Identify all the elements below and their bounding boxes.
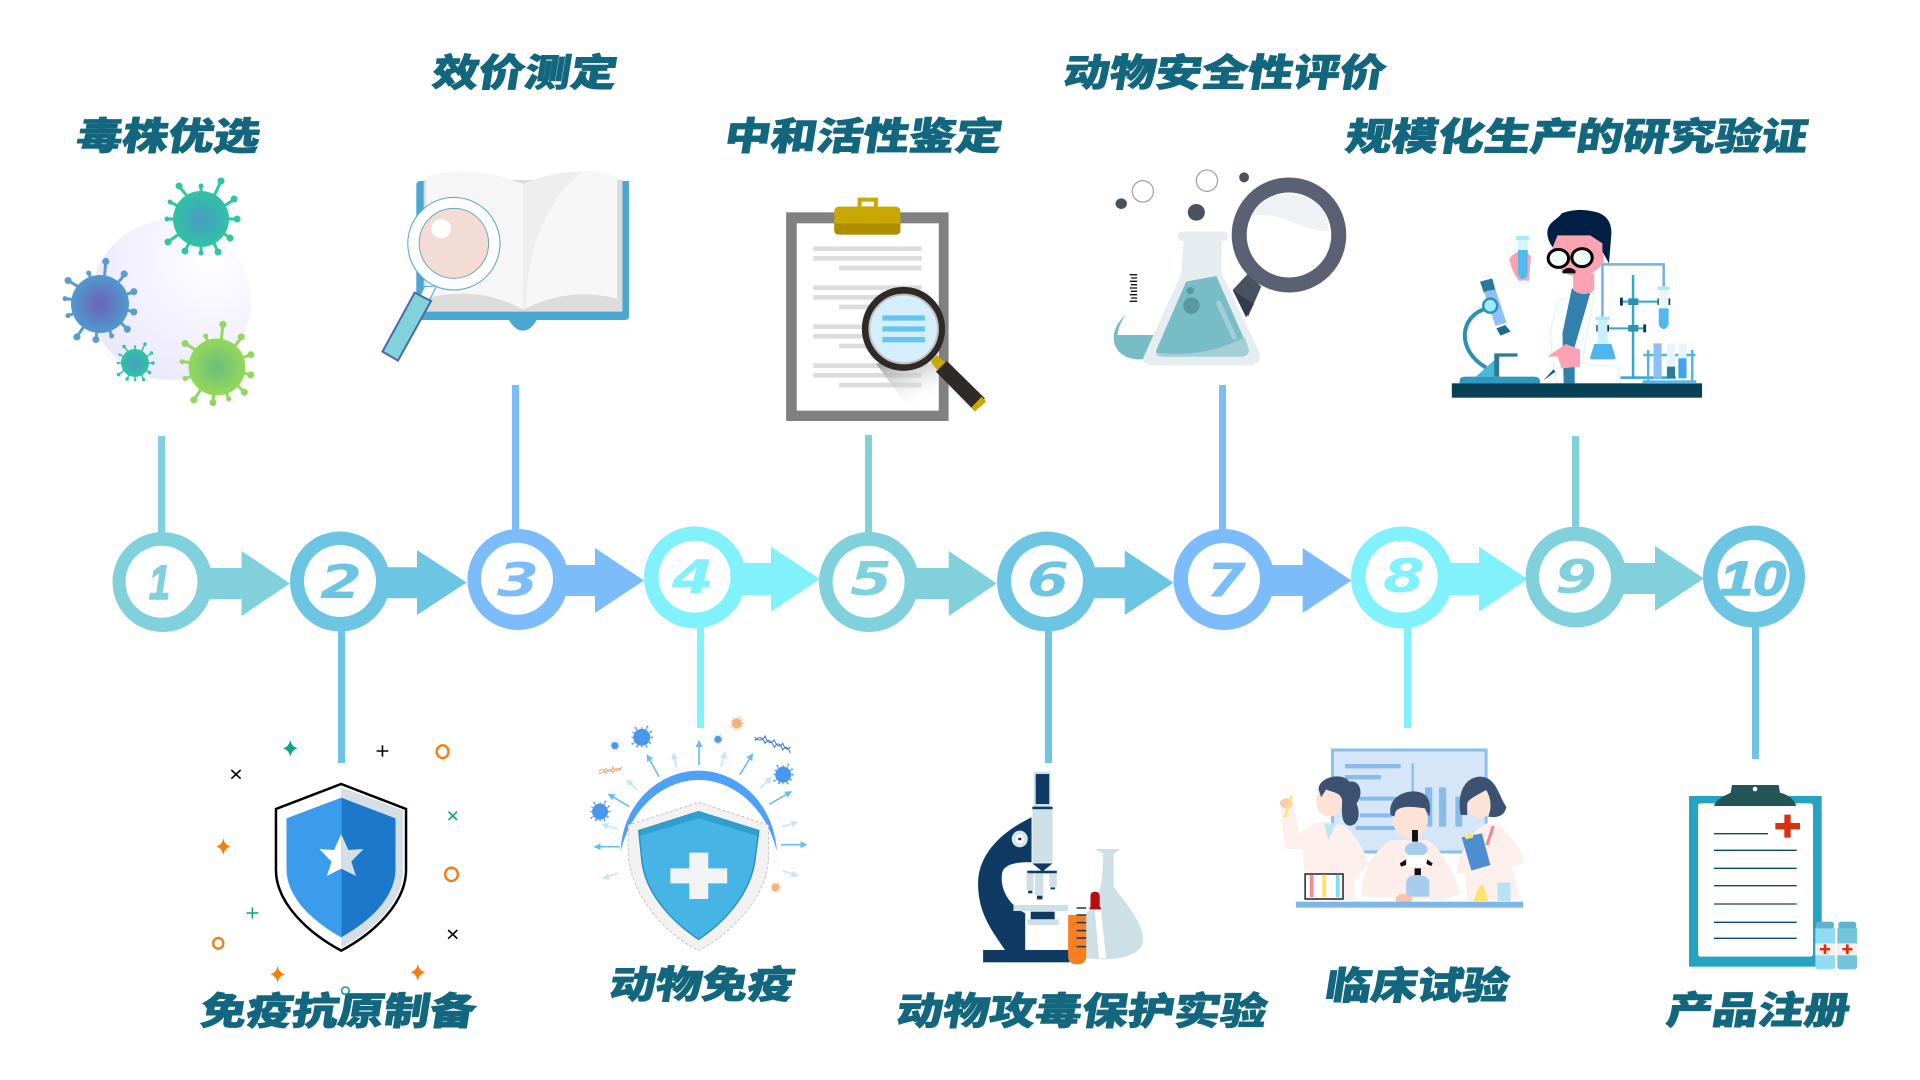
node 8 [1351, 526, 1453, 628]
bench [1452, 383, 1702, 398]
blue dna [755, 736, 790, 753]
green ring [342, 987, 349, 994]
microscope [1465, 308, 1487, 368]
test tube [1068, 893, 1086, 915]
test tube rack [1305, 874, 1343, 899]
radiating arrows, strong [595, 741, 806, 847]
orange ring [445, 868, 458, 881]
stem 7 [1219, 385, 1226, 535]
green cross [449, 812, 457, 820]
right researcher [1456, 823, 1523, 900]
hair [1547, 210, 1611, 263]
arrow 6 to 7 [1090, 550, 1174, 615]
node 8: 8 [1383, 549, 1425, 603]
stem 10 [1752, 622, 1759, 759]
blue germ [714, 735, 722, 743]
title: 临床试验: 临床试验 [1323, 964, 1513, 1008]
node 5: 5 [850, 552, 892, 606]
moustache [1562, 268, 1576, 273]
blue germ [611, 741, 619, 750]
desk [1296, 902, 1523, 908]
neck and face [1573, 273, 1594, 294]
node 1 [112, 532, 212, 632]
node 5 [819, 532, 919, 632]
blue germ [632, 727, 652, 747]
jar [1497, 883, 1511, 901]
node 4 [644, 526, 746, 628]
arrow 9 to 10 [1618, 546, 1704, 611]
black cross [231, 770, 241, 779]
node 6: 6 [1027, 553, 1069, 607]
icon: three researchers [1280, 750, 1523, 908]
radiating arrows, light [602, 752, 798, 878]
orange germ [771, 882, 780, 892]
stem 8 [1404, 624, 1411, 728]
arrow 7 to 8 [1267, 548, 1352, 613]
icon: shield with star [213, 740, 458, 994]
arc [621, 771, 777, 852]
vial right [1837, 922, 1857, 969]
blue germ [591, 802, 610, 821]
shirt [1562, 288, 1590, 383]
outer shield [628, 802, 768, 951]
stem 3 [512, 385, 519, 535]
icon: shield with cross and germs [591, 717, 793, 951]
blue germ [774, 765, 793, 784]
arrow 5 to 6 [912, 551, 997, 616]
title: 动物攻毒保护实验: 动物攻毒保护实验 [894, 990, 1271, 1033]
icon: open book with magnifier [382, 171, 629, 361]
dropper [1095, 909, 1106, 958]
teal virus [167, 181, 237, 253]
stem 4 [697, 624, 704, 728]
title: 效价测定: 效价测定 [430, 52, 620, 95]
node 1: 1 [149, 557, 170, 610]
blue virus [55, 256, 146, 348]
small virus [118, 344, 153, 380]
middle researcher [1362, 840, 1460, 900]
title: 动物安全性评价: 动物安全性评价 [1061, 52, 1389, 95]
icon: flask with magnifier [1114, 170, 1339, 366]
arrow 3 to 4 [560, 548, 644, 613]
node 10 [1703, 526, 1805, 628]
node 3 [468, 529, 568, 630]
title: 中和活性鉴定: 中和活性鉴定 [722, 116, 1005, 158]
node 10: 10 [1720, 553, 1786, 606]
stem 9 [1572, 436, 1579, 531]
orange germ [731, 717, 743, 729]
stand and frame [1602, 264, 1664, 317]
chart board [1332, 750, 1486, 852]
glasses [1548, 249, 1569, 267]
coat [1550, 293, 1621, 383]
tube [1034, 772, 1050, 807]
green plus [247, 907, 258, 919]
stem 5 [865, 435, 872, 535]
writing hand [1547, 344, 1580, 368]
black cross [448, 930, 457, 939]
inner shield [639, 812, 759, 939]
arrow 8 to 9 [1445, 547, 1528, 612]
arrow 1 to 2 [205, 551, 290, 616]
orange sparkle [270, 966, 285, 983]
orange ring [213, 938, 223, 949]
orange dna [599, 767, 622, 774]
arrow 4 to 5 [738, 547, 820, 612]
base [983, 950, 1069, 962]
orange ring [437, 745, 449, 758]
node 7: 7 [1206, 554, 1246, 608]
green virus [172, 319, 263, 411]
black plus [377, 745, 388, 757]
table microscope [1412, 830, 1418, 842]
title: 毒株优选: 毒株优选 [74, 116, 263, 158]
icon: viruses [55, 181, 263, 411]
green sparkle [283, 740, 297, 757]
icon: scientist at lab bench [1452, 210, 1702, 398]
node 3: 3 [497, 553, 539, 607]
node 4: 4 [671, 550, 714, 604]
node 9: 9 [1555, 550, 1597, 604]
title: 产品注册: 产品注册 [1664, 990, 1853, 1032]
plus sign [670, 853, 727, 899]
node 9 [1526, 526, 1626, 628]
left researcher [1281, 807, 1369, 900]
title: 动物免疫: 动物免疫 [607, 964, 797, 1007]
title: 规模化生产的研究验证: 规模化生产的研究验证 [1343, 115, 1812, 159]
stem 1 [158, 436, 165, 536]
arm [978, 817, 1032, 950]
icon: microscope and flask [978, 772, 1143, 964]
rack [1642, 350, 1696, 382]
raised hand [1509, 249, 1531, 281]
node 2 [290, 532, 390, 632]
flask [1086, 849, 1143, 959]
node 2: 2 [320, 555, 362, 609]
vial left [1815, 922, 1835, 969]
orange sparkle [216, 838, 231, 855]
stem 6 [1045, 628, 1052, 763]
orange sparkle [411, 964, 425, 981]
stem 2 [338, 628, 345, 763]
icon: medical clipboard and vials [1689, 785, 1857, 969]
node 6 [997, 532, 1097, 632]
arrow 2 to 3 [383, 550, 467, 615]
yellow flask [1473, 886, 1488, 901]
node 7 [1174, 529, 1274, 630]
icon: clipboard with magnifier [786, 200, 986, 421]
title: 免疫抗原制备: 免疫抗原制备 [198, 991, 479, 1033]
